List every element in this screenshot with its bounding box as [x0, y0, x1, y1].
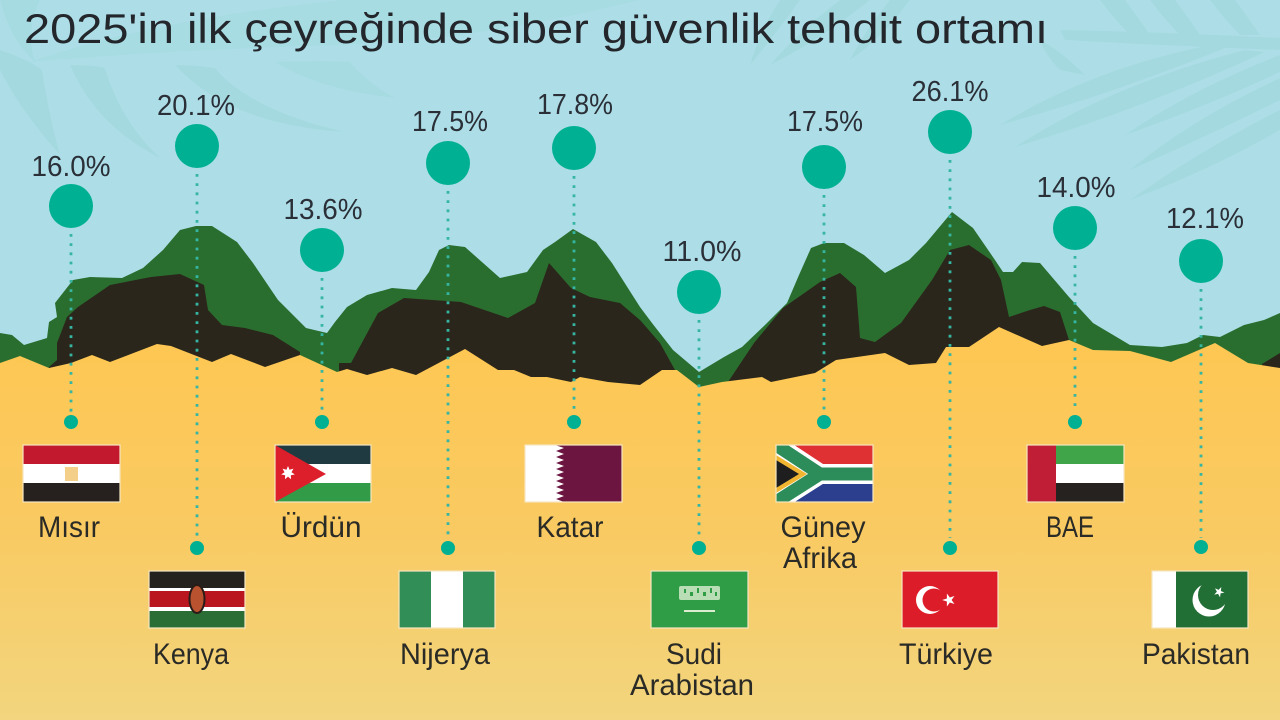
palm leaves background — [0, 0, 1280, 200]
name: Güney Afrika: Güney — [780, 511, 866, 544]
flag: Türkiye — [902, 571, 998, 628]
name: Sudi Arabistan: Arabistan — [630, 669, 754, 702]
value: Sudi Arabistan: 11.0% — [662, 236, 742, 268]
country: Ürdün — [275, 194, 371, 544]
flag: Ürdün — [275, 445, 371, 502]
name: Güney Afrika — [780, 511, 866, 575]
flag: BAE — [1027, 445, 1124, 502]
flag: Güney Afrika — [776, 445, 873, 502]
country: BAE — [1027, 172, 1124, 544]
name: Sudi Arabistan — [630, 638, 754, 702]
country: Sudi Arabistan — [630, 236, 754, 702]
value: Kenya: 20.1% — [157, 90, 235, 122]
value: BAE: 14.0% — [1036, 172, 1116, 204]
name: Kenya: Kenya — [153, 638, 229, 671]
country: Nijerya — [399, 106, 495, 671]
value: Türkiye: 26.1% — [912, 76, 988, 108]
flag: Katar — [525, 445, 622, 502]
country: Güney Afrika — [776, 106, 873, 575]
country: Pakistan — [1142, 203, 1250, 671]
value: Mısır: 16.0% — [32, 151, 110, 183]
name: Nijerya: Nijerya — [400, 638, 490, 671]
name: Sudi Arabistan: Sudi — [666, 638, 722, 671]
value: Pakistan: 12.1% — [1166, 203, 1244, 235]
flag: Mısır — [23, 445, 120, 502]
name: Ürdün: Ürdün — [280, 511, 362, 544]
value: Katar: 17.8% — [537, 89, 613, 121]
country: Kenya — [149, 90, 245, 671]
country: Türkiye — [899, 76, 998, 671]
value: Ürdün: 13.6% — [284, 194, 362, 226]
name: BAE: BAE — [1046, 511, 1094, 544]
value: Nijerya: 17.5% — [412, 106, 488, 138]
name: Mısır: Mısır — [38, 511, 100, 544]
country: Mısır — [23, 151, 120, 544]
flag: Nijerya — [399, 571, 495, 628]
name: Türkiye: Türkiye — [899, 638, 993, 671]
value: Güney Afrika: 17.5% — [787, 106, 863, 138]
flag: Kenya — [149, 571, 245, 628]
name: Güney Afrika: Afrika — [783, 542, 857, 575]
title: 2025'in ilk çeyreğinde siber güvenlik tehdit ortamı — [24, 5, 1048, 52]
flag: Sudi Arabistan — [651, 571, 748, 628]
name: Katar: Katar — [536, 511, 604, 544]
name: Pakistan: Pakistan — [1142, 638, 1250, 671]
flag: Pakistan — [1152, 571, 1248, 628]
sand ground — [0, 327, 1280, 720]
mountains: dark range — [49, 245, 1280, 392]
mountains: green range — [0, 212, 1280, 400]
country: Katar — [525, 89, 622, 544]
